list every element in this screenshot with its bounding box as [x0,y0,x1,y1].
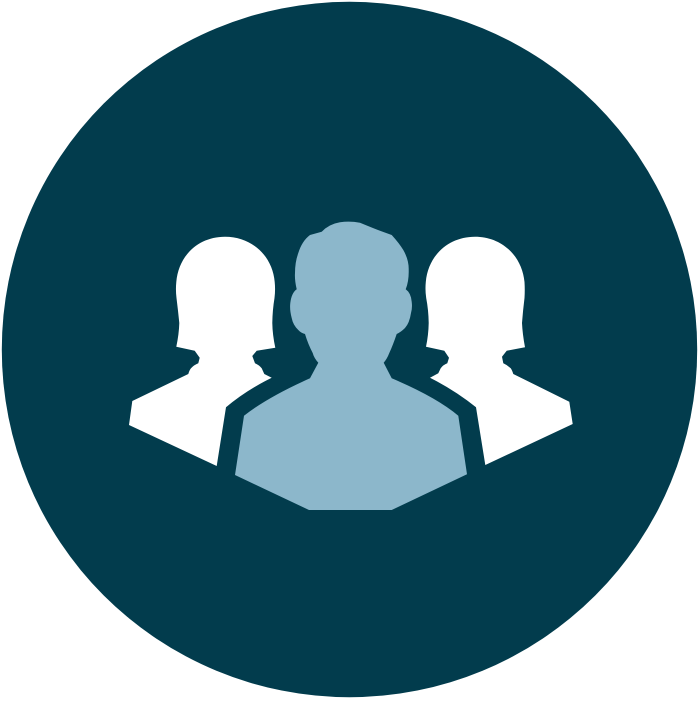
icon: left woman silhouette [129,237,275,466]
icon: right woman silhouette [425,237,573,465]
icon: centre man silhouette [235,222,467,510]
